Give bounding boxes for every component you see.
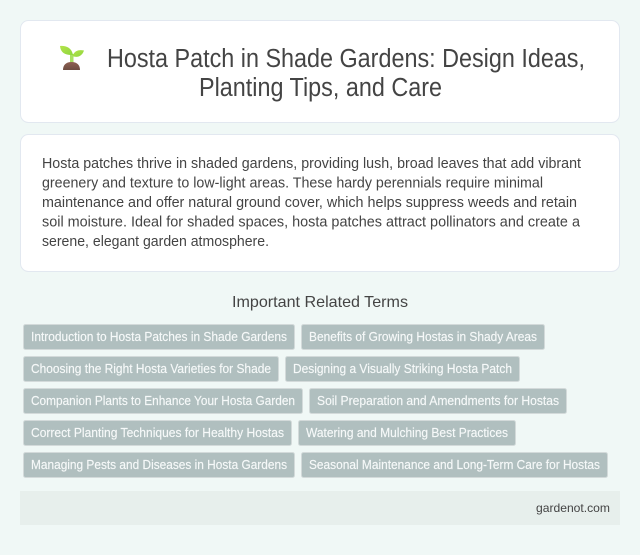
panel: intro paragraph: greenery and texture to low-light areas. These hardy perennials require minimal <box>42 176 543 192</box>
title: Planting Tips, and Care <box>199 74 442 102</box>
tag: soil preparation <box>310 388 566 414</box>
tag: planting techniques <box>24 420 292 446</box>
tag: companion plants <box>24 388 302 414</box>
tag: pests <box>24 452 294 478</box>
panel: intro paragraph: Hosta patches thrive in shaded gardens, providing lush, broad leaves that add vibrant <box>42 156 581 172</box>
tag: designing <box>286 356 520 382</box>
tag: pests: Managing Pests and Diseases in Hosta Gardens <box>31 458 287 472</box>
tag: benefits <box>302 324 544 350</box>
tag: seasonal maintenance: Seasonal Maintenance and Long-Term Care for Hostas <box>309 458 600 472</box>
footer <box>20 491 620 525</box>
title: Hosta Patch in Shade Gardens: Design Ideas, <box>107 45 585 73</box>
tag: watering <box>298 420 516 446</box>
tag: companion plants: Companion Plants to Enhance Your Hosta Garden <box>31 394 295 408</box>
title <box>107 45 585 102</box>
icon: sprout <box>60 46 84 70</box>
tag: soil preparation: Soil Preparation and Amendments for Hostas <box>317 394 559 408</box>
panel: intro paragraph: maintenance and offer natural ground cover, which helps suppress weeds and retain <box>42 195 577 211</box>
tag: seasonal maintenance <box>302 452 608 478</box>
tag: planting techniques: Correct Planting Techniques for Healthy Hostas <box>31 426 284 440</box>
panel: intro paragraph: serene, elegant garden atmosphere. <box>42 234 269 250</box>
footer: gardenot.com <box>536 501 610 515</box>
panel: title card <box>20 20 620 122</box>
tag: introduction: Introduction to Hosta Patches in Shade Gardens <box>31 330 287 344</box>
tag: choosing varieties <box>24 356 278 382</box>
panel: related term tags <box>24 324 608 478</box>
tag: benefits: Benefits of Growing Hostas in Shady Areas <box>309 330 537 344</box>
panel: intro paragraph: soil moisture. Ideal for shaded spaces, hosta patches attract pollinators and create a <box>42 214 581 230</box>
heading: important related terms: Important Related Terms <box>232 294 408 311</box>
tag: introduction <box>24 324 294 350</box>
tag: designing: Designing a Visually Striking Hosta Patch <box>293 362 512 376</box>
tag: watering: Watering and Mulching Best Practices <box>306 426 508 440</box>
panel: intro paragraph <box>20 134 620 272</box>
tag: choosing varieties: Choosing the Right Hosta Varieties for Shade <box>31 362 271 376</box>
